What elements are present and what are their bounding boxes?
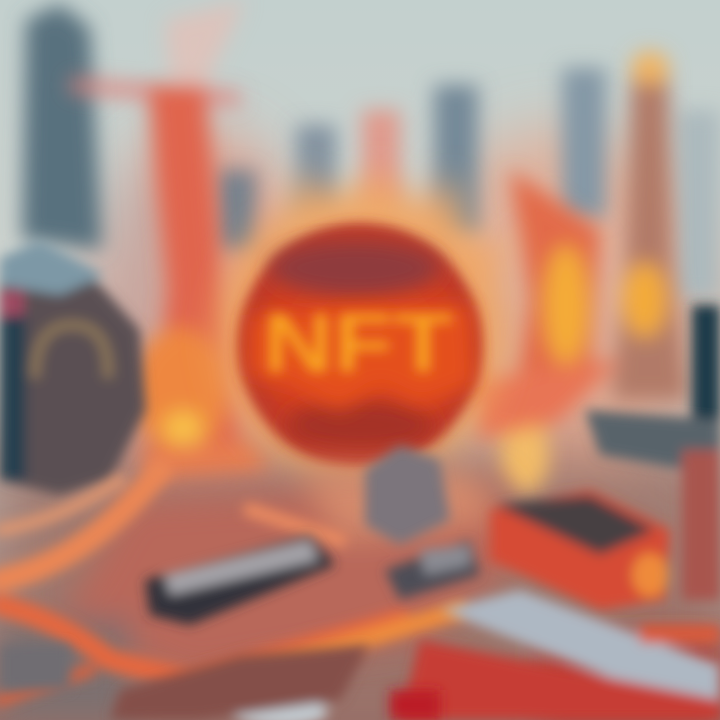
sphere lettering: NFT xyxy=(263,296,453,390)
right burning towers xyxy=(470,51,688,493)
grey central vehicles and machinery xyxy=(145,445,480,625)
bottom right pale slab xyxy=(400,590,720,720)
orange crane and tower xyxy=(70,0,270,480)
distant skyscrapers xyxy=(22,4,720,300)
lower street ground xyxy=(0,470,720,720)
right red block building xyxy=(490,305,720,610)
glow around the sphere xyxy=(215,170,510,480)
left dark dome building xyxy=(0,240,146,495)
glowing roads xyxy=(0,470,460,700)
bottom foreground details xyxy=(0,645,440,720)
central NFT sphere xyxy=(238,223,482,467)
